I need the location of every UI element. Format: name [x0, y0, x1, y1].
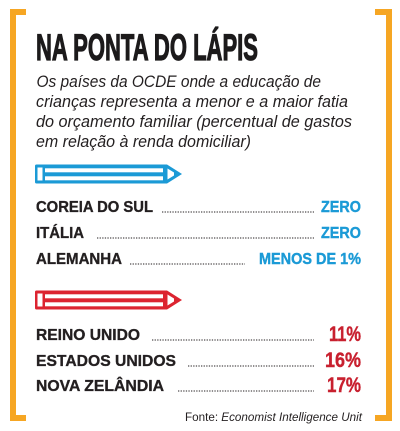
row: Alemanha: ALEMANHA	[36, 251, 122, 268]
intro text: em relação à renda domiciliar)	[36, 133, 251, 151]
intro text: do orçamento familiar (percentual de gastos	[36, 113, 352, 131]
row: Estados Unidos: 16%	[325, 349, 361, 372]
row: Reino Unido: REINO UNIDO	[36, 327, 140, 344]
intro text	[36, 73, 352, 151]
row: Itália: ITÁLIA	[36, 223, 84, 242]
row: Nova Zelândia: 17%	[327, 374, 361, 397]
row: Coreia do Sul: COREIA DO SUL	[36, 199, 153, 216]
row: Itália	[36, 223, 361, 242]
row: Nova Zelândia: NOVA ZELÂNDIA	[36, 376, 164, 395]
intro text: crianças representa a menor e a maior fatia	[36, 93, 348, 111]
right orange bracket	[375, 9, 392, 421]
intro text: Os países da OCDE onde a educação de	[36, 73, 321, 91]
row: Reino Unido	[36, 323, 361, 346]
row: Alemanha	[36, 251, 361, 268]
row: Estados Unidos: ESTADOS UNIDOS	[36, 353, 176, 370]
row: Nova Zelândia	[36, 374, 361, 397]
row: Coreia do Sul: ZERO	[321, 199, 361, 216]
row: Itália: ZERO	[321, 225, 361, 242]
row: Alemanha: MENOS DE 1%	[259, 251, 361, 268]
row: Estados Unidos	[36, 349, 361, 372]
row: Reino Unido: 11%	[329, 323, 361, 346]
left orange bracket	[10, 9, 26, 421]
source note: Fonte: Economist Intelligence Unit	[185, 410, 363, 424]
icon: blue pencil	[35, 164, 182, 184]
row: Coreia do Sul	[36, 199, 361, 216]
icon: red pencil	[35, 290, 182, 310]
